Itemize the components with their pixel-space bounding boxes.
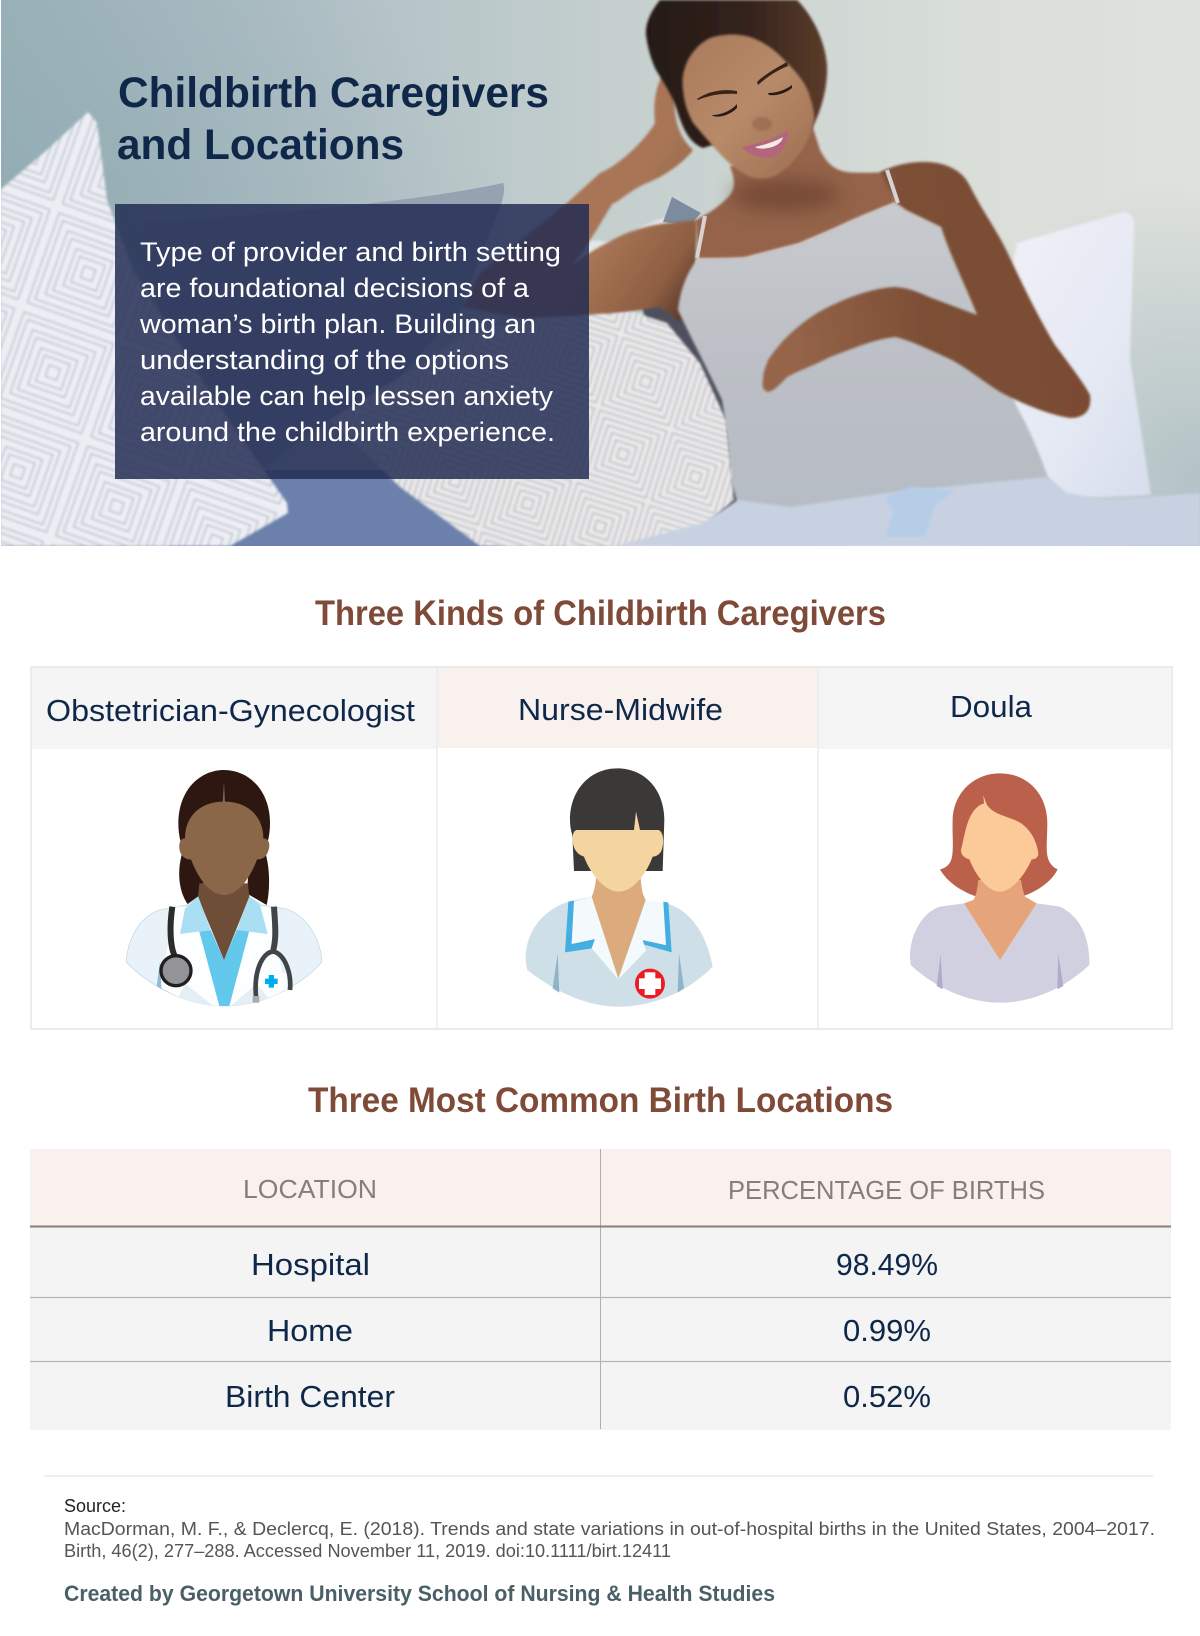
header: location: LOCATION — [243, 1174, 377, 1204]
caregivers table — [31, 667, 1172, 1029]
row: home: 0.99% — [843, 1313, 931, 1348]
icon: doula — [910, 773, 1089, 1003]
white pillow, right — [1013, 212, 1152, 498]
white sliver behind shoulder — [589, 218, 672, 254]
intro paragraph: woman’s birth plan. Building an — [139, 309, 536, 339]
intro paragraph: available can help lessen anxiety — [140, 381, 554, 411]
pants and blanket — [615, 477, 1200, 546]
intro paragraph: understanding of the options — [140, 345, 509, 375]
heading: caregivers: Three Kinds of Childbirth Caregivers — [315, 594, 886, 633]
pillow, patterned, left — [0, 112, 288, 546]
column label: nurse-midwife: Nurse-Midwife — [518, 692, 723, 727]
column label: obstetrician: Obstetrician-Gynecologist — [46, 693, 415, 728]
icon: nurse-midwife — [526, 768, 713, 1007]
source block: Birth, 46(2), 277–288. Accessed November 11, 2019. doi:10.1111/birt.12411 — [64, 1541, 671, 1561]
source block: Source: — [64, 1496, 126, 1516]
tank top — [678, 202, 1060, 512]
tank straps — [697, 170, 898, 258]
pillow, patterned, centre — [330, 312, 734, 546]
column label: doula: Doula — [950, 689, 1033, 724]
row: birth center — [225, 1379, 931, 1414]
intro paragraph: Type of provider and birth setting — [140, 237, 561, 267]
raised arm and upper arm — [463, 72, 697, 322]
intro paragraph — [139, 237, 561, 447]
shadow between pillow and tank — [641, 306, 738, 517]
table backgrounds and rules — [30, 1149, 1171, 1430]
row: hospital: Hospital — [251, 1247, 370, 1282]
row: home: Home — [267, 1313, 353, 1348]
row: hospital: 98.49% — [836, 1247, 938, 1282]
neck shadow — [730, 179, 840, 211]
birth locations table — [30, 1149, 1171, 1430]
drawstring bow — [885, 487, 956, 537]
heading: birth locations: Three Most Common Birth Locations — [308, 1081, 893, 1120]
grey textured cushion — [366, 183, 504, 204]
title — [117, 69, 549, 169]
intro text panel — [115, 204, 589, 479]
blue bedding — [170, 470, 500, 546]
chest and neck skin — [696, 125, 895, 258]
wall background — [0, 0, 1200, 546]
header: percentage of births: PERCENTAGE OF BIRTHS — [728, 1175, 1045, 1205]
credit line: Created by Georgetown University School of Nursing & Health Studies — [64, 1581, 775, 1606]
arm resting on belly — [763, 162, 1090, 418]
hero photo: pregnant woman on bed — [0, 0, 1200, 546]
intro paragraph: around the childbirth experience. — [140, 417, 555, 447]
icon: doctor — [126, 770, 322, 1013]
source block — [64, 1496, 1155, 1561]
title: and Locations — [117, 121, 404, 169]
intro paragraph: are foundational decisions of a — [140, 273, 530, 303]
hair — [646, 0, 827, 148]
face — [682, 34, 814, 178]
title: Childbirth Caregivers — [118, 69, 549, 117]
small grey cushion — [663, 197, 701, 225]
row: birth center: 0.52% — [843, 1379, 931, 1414]
tank neckline lace — [698, 202, 895, 258]
caregivers table frame — [31, 667, 1172, 1029]
row: home — [267, 1313, 931, 1348]
source block: MacDorman, M. F., & Declercq, E. (2018). Trends and state variations in out-of-hospital births in the United States, 2004–2017. — [64, 1519, 1155, 1539]
row: hospital — [251, 1247, 938, 1282]
row: birth center: Birth Center — [225, 1379, 395, 1414]
facial features — [697, 62, 792, 158]
